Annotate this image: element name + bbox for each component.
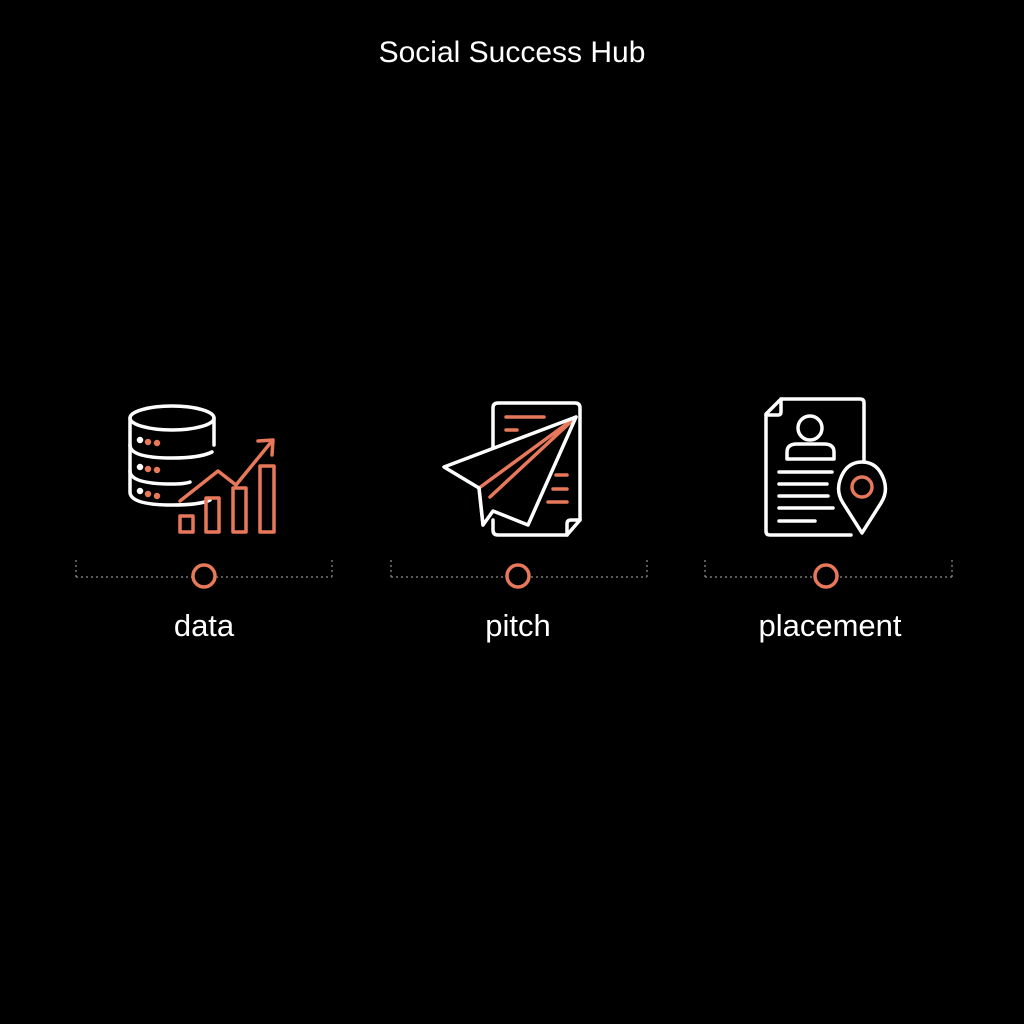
timeline: pitch: [391, 560, 647, 587]
timeline: data: [76, 560, 332, 587]
title: Social Success Hub: [379, 36, 645, 69]
label: placement: placement: [758, 608, 902, 643]
label: data: data: [174, 608, 235, 643]
panel: data: [76, 406, 332, 643]
icon: paper plane over document: [444, 403, 580, 535]
icon: database with growth chart: [130, 406, 274, 532]
timeline: placement: [705, 560, 952, 587]
label: pitch: pitch: [485, 608, 551, 643]
panel: placement: [705, 399, 952, 643]
panel: pitch: [391, 403, 647, 643]
icon: resume with location pin: [766, 399, 885, 535]
